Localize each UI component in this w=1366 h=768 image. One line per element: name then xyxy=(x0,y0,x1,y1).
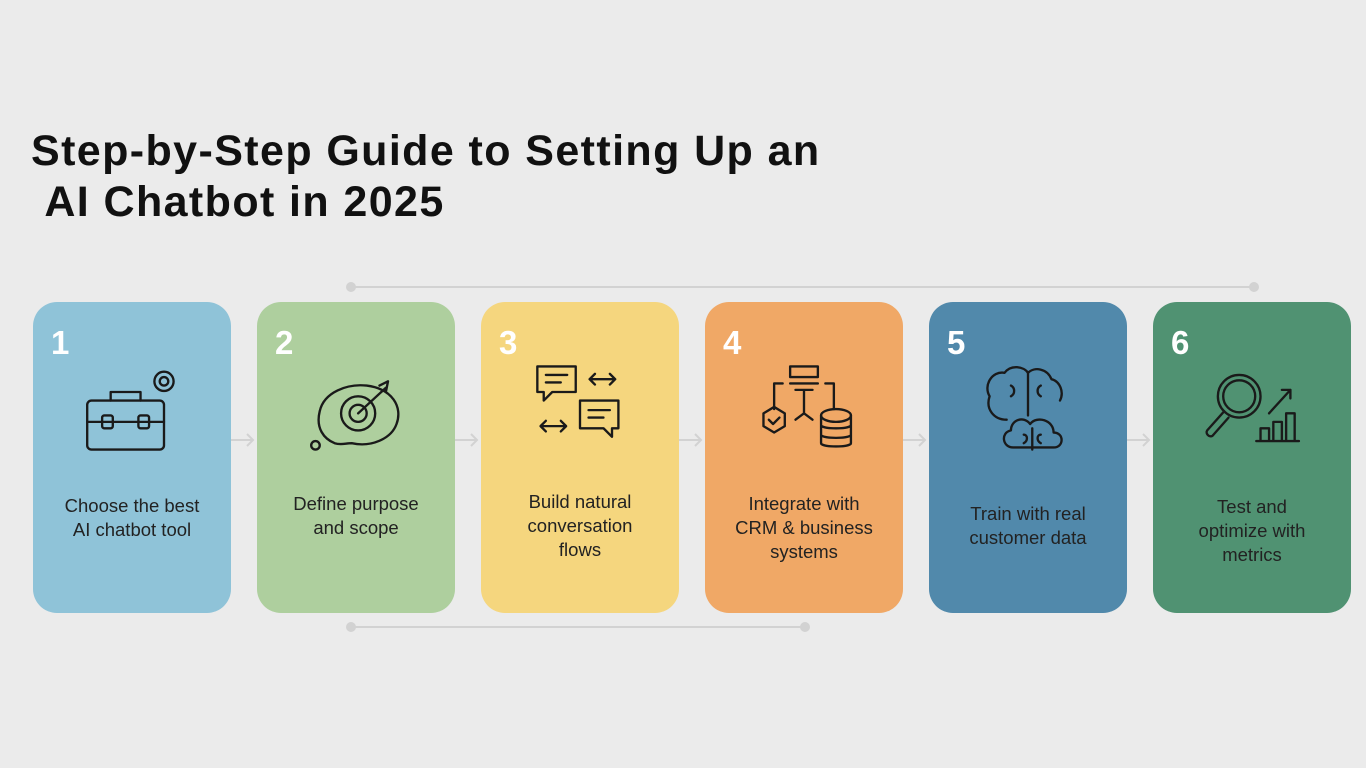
icon: toolbox with gear xyxy=(86,370,175,451)
title xyxy=(31,127,821,226)
card 1: AI chatbot tool xyxy=(73,519,191,540)
card 3: Build natural xyxy=(529,491,631,512)
card 3: conversation xyxy=(528,515,632,536)
card 4: CRM & business xyxy=(735,517,873,538)
card 4 xyxy=(705,302,903,613)
card 1: Choose the best xyxy=(65,495,199,516)
card 6: metrics xyxy=(1222,544,1282,565)
card 5: 5 xyxy=(947,324,965,361)
title: AI Chatbot in 2025 xyxy=(44,178,445,226)
card 4: 4 xyxy=(723,324,741,361)
card 6 xyxy=(1153,302,1351,613)
title: Step-by-Step Guide to Setting Up an xyxy=(31,127,821,175)
icon: magnifier chart xyxy=(1206,374,1300,442)
card 4: systems xyxy=(770,541,838,562)
icon: brain cloud xyxy=(986,366,1063,451)
card 3 xyxy=(481,302,679,613)
card 6: Test and xyxy=(1217,496,1287,517)
card 6: optimize with xyxy=(1199,520,1305,541)
card 4: Integrate with xyxy=(748,493,860,514)
card 3: flows xyxy=(559,539,601,560)
card 2: Define purpose xyxy=(293,493,419,514)
card 6: 6 xyxy=(1171,324,1189,361)
card 2 xyxy=(257,302,455,613)
card 3: 3 xyxy=(499,324,517,361)
card 1 xyxy=(33,302,231,613)
card 2: 2 xyxy=(275,324,293,361)
card 5 xyxy=(929,302,1127,613)
icon: target thought xyxy=(310,380,400,451)
card 5: customer data xyxy=(969,527,1087,548)
icon: integration diagram xyxy=(762,365,852,448)
card 2: and scope xyxy=(313,517,399,538)
icon: chat bubbles xyxy=(536,365,620,438)
card 5: Train with real xyxy=(970,503,1086,524)
card 1: 1 xyxy=(51,324,69,361)
